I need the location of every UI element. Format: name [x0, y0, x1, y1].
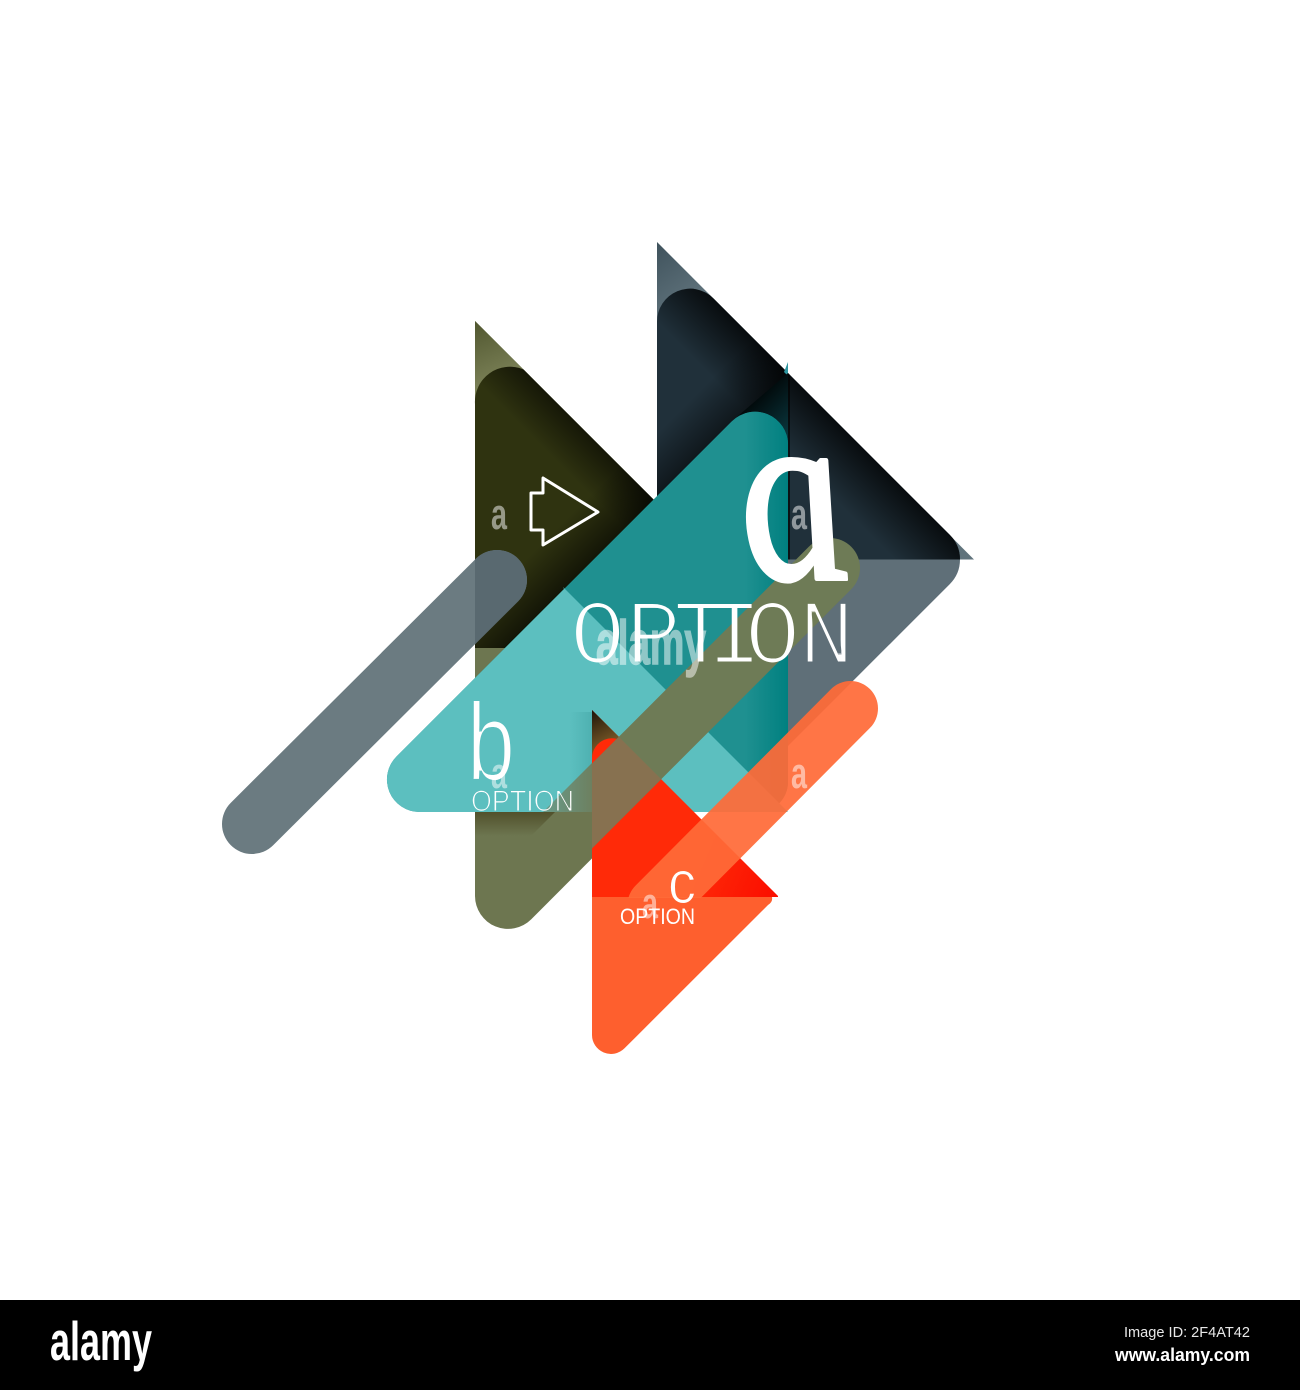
watermark letters: a	[491, 490, 507, 539]
shape: orange diagonal band	[655, 708, 850, 905]
footer bar	[0, 1300, 1300, 1390]
shape: gray rounded diagonal bar	[252, 580, 497, 824]
label: b: b	[467, 681, 515, 804]
watermark letters: a	[791, 749, 807, 798]
label: big OPTION: OPTION	[570, 586, 854, 691]
label: big a: a	[704, 352, 872, 634]
footer: image id: Image ID: 2F4AT42	[1124, 1324, 1250, 1341]
watermark letters: a	[791, 490, 807, 539]
shape: dark navy and gray triangle	[640, 240, 980, 746]
shape: red triangle	[592, 710, 778, 897]
watermark letters: a	[642, 879, 658, 928]
footer: website: www.alamy.com	[1114, 1345, 1250, 1365]
watermark letters: a	[491, 749, 507, 798]
shape: olive triangle	[474, 321, 654, 929]
shape: olive diagonal band	[500, 568, 830, 898]
watermark letters	[491, 490, 807, 928]
label: c: c	[668, 849, 696, 916]
shape: teal triangle	[387, 362, 788, 815]
watermark: alamy centre: alamy	[596, 609, 706, 678]
label: c OPTION: OPTION	[620, 904, 695, 929]
shape: orange rounded triangle	[592, 897, 772, 1054]
icon: outlined arrow	[531, 478, 598, 545]
label: b OPTION: OPTION	[471, 785, 574, 818]
footer: alamy logo: alamy	[50, 1310, 152, 1372]
shape: olive lower shading	[475, 812, 555, 836]
